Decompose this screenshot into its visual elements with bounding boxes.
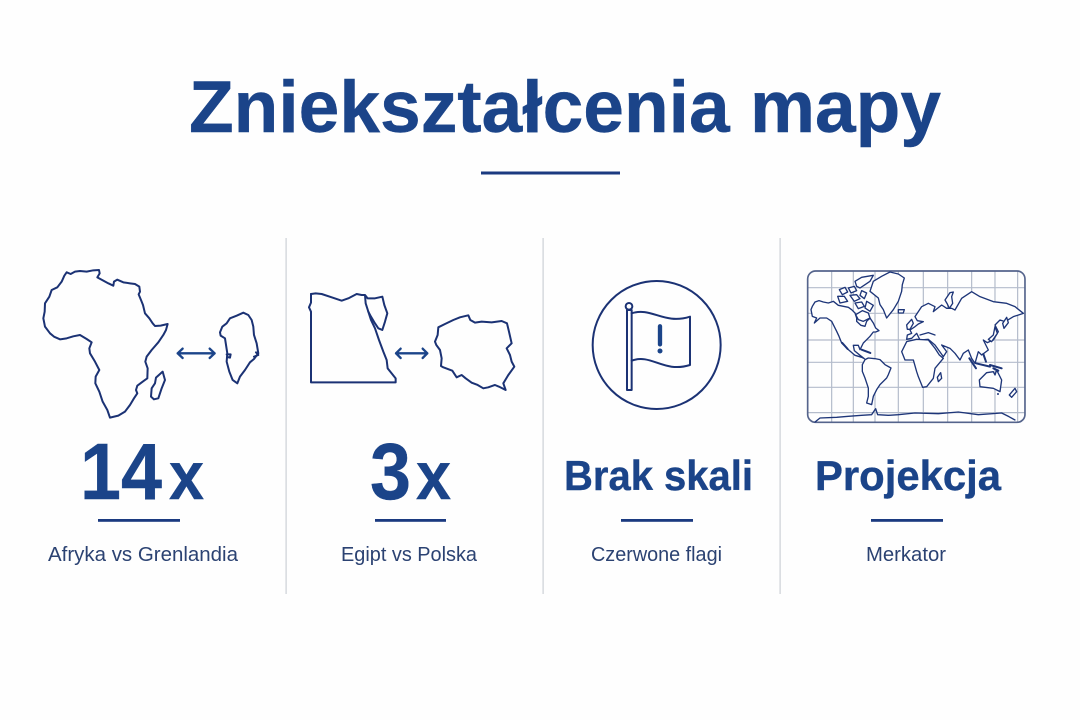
icon: Mercator world map	[808, 271, 1025, 422]
caption: Merkator	[866, 544, 946, 566]
icon: flag with exclamation mark in a circle	[593, 281, 721, 409]
panel: Egipt vs Polska	[309, 293, 514, 566]
heading: Brak skali	[564, 452, 753, 499]
title: Zniekształcenia mapy	[189, 67, 941, 148]
big number: 3	[370, 427, 411, 516]
caption: Egipt vs Polska	[341, 544, 478, 566]
big number: 14	[80, 427, 162, 516]
panel: Projekcja	[808, 271, 1025, 566]
caption: Czerwone flagi	[591, 544, 722, 566]
caption: Afryka vs Grenlandia	[48, 544, 239, 566]
icon: Egypt and Poland outlines	[309, 293, 514, 390]
panel: Brak skali	[564, 281, 753, 566]
big number	[370, 427, 451, 516]
big number: x	[169, 438, 204, 514]
arrow	[178, 349, 215, 358]
panel: Afryka vs Grenlandia	[43, 270, 258, 566]
arrow	[396, 349, 427, 358]
big number: x	[416, 438, 451, 514]
heading: Projekcja	[815, 452, 1002, 499]
icon: Africa, Madagascar and Greenland outlines	[43, 270, 258, 418]
